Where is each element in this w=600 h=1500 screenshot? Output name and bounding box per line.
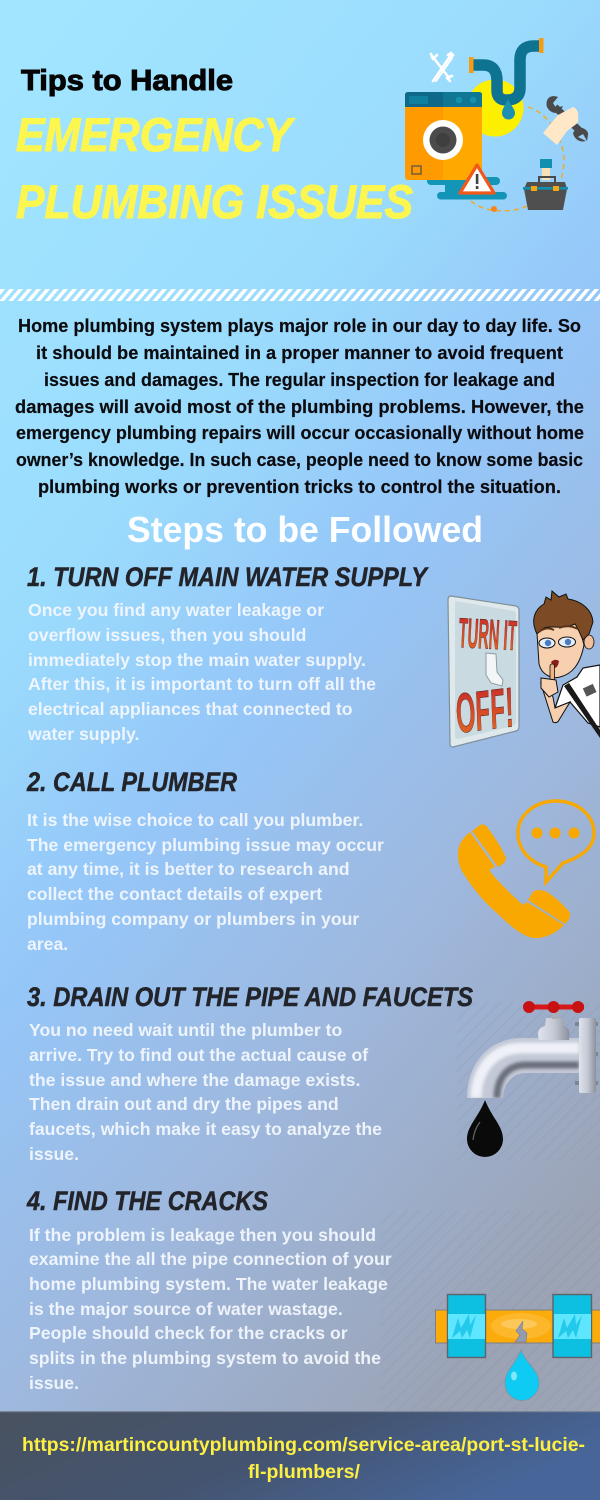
title block — [16, 65, 413, 228]
footer link text: https://martincountyplumbing.com/service-area/port-st-lucie- — [22, 1435, 585, 1456]
step 2 text — [27, 810, 384, 954]
step 4 text: is the major source of water wastage. — [29, 1299, 343, 1319]
icon: turn it off switch — [448, 596, 519, 747]
step 3 text: faucets, which make it easy to analyze the — [29, 1119, 382, 1139]
icon: bitmoji man — [534, 591, 600, 738]
step 2 text: plumbing company or plumbers in your — [27, 909, 359, 929]
icon: faucet — [467, 1001, 598, 1157]
intro paragraph: issues and damages. The regular inspection for leakage and — [44, 369, 555, 390]
step 1 text: After this, it is important to turn off all the — [28, 674, 376, 694]
step 2 text: collect the contact details of expert — [27, 884, 322, 904]
step 3 text — [29, 1020, 382, 1164]
step 1: OFF! — [452, 675, 517, 745]
step 4 text: If the problem is leakage then you should — [29, 1225, 376, 1245]
step 2 heading: 2. CALL PLUMBER — [26, 767, 237, 797]
step 3 heading: 3. DRAIN OUT THE PIPE AND FAUCETS — [27, 982, 473, 1012]
step 3 text: the issue and where the damage exists. — [29, 1070, 360, 1090]
step 1 text: immediately stop the main water supply. — [28, 650, 366, 670]
step 4 text: home plumbing system. The water leakage — [29, 1274, 388, 1294]
step 2 text: The emergency plumbing issue may occur — [27, 835, 384, 855]
step 3 text: arrive. Try to find out the actual cause of — [29, 1045, 368, 1065]
title: plumbing issues: PLUMBING ISSUES — [16, 175, 413, 228]
title: tips to handle: Tips to Handle — [21, 65, 233, 97]
intro paragraph: emergency plumbing repairs will occur occasionally without home — [16, 422, 584, 443]
step 4 — [26, 1186, 600, 1411]
step 3 text: You no need wait until the plumber to — [29, 1020, 343, 1040]
title: emergency: EMERGENCY — [16, 108, 295, 161]
intro paragraph: owner’s knowledge. In such case, people need to know some basic — [16, 449, 583, 470]
intro paragraph: damages will avoid most of the plumbing problems. However, the — [15, 396, 584, 417]
intro paragraph: plumbing works or prevention tricks to control the situation. — [38, 476, 561, 497]
illustration: plumbing hero — [405, 38, 588, 212]
footer band — [0, 1411, 600, 1500]
step 4 heading: 4. FIND THE CRACKS — [26, 1186, 268, 1216]
hatch panel — [380, 1210, 600, 1411]
heading: steps to be followed: Steps to be Followed — [127, 509, 483, 550]
icon: crossed tools — [431, 53, 453, 81]
step 1 text: electrical appliances that connected to — [28, 699, 353, 719]
step 1 — [27, 562, 600, 747]
step 1 text — [27, 600, 376, 744]
step 3 — [27, 982, 600, 1164]
icon: hand with wrench — [543, 96, 588, 145]
icon: pipe — [469, 38, 544, 120]
step 4 text: splits in the plumbing system to avoid the — [29, 1348, 381, 1368]
hatch panel — [457, 1002, 600, 1160]
icon: warning triangle — [460, 165, 494, 193]
icon: toolbox — [523, 159, 568, 210]
icon: speech bubble — [518, 801, 594, 882]
step 1 text: Once you find any water leakage or — [28, 600, 324, 620]
step 1 heading: 1. TURN OFF MAIN WATER SUPPLY — [27, 562, 430, 592]
step 1 text: water supply. — [27, 724, 139, 744]
step 4 text — [29, 1225, 392, 1393]
intro paragraph — [15, 315, 584, 497]
icon: phone — [458, 824, 570, 938]
step 1 text: overflow issues, then you should — [28, 625, 306, 645]
step 2 text: It is the wise choice to call you plumber. — [27, 810, 363, 830]
footer link text — [22, 1435, 585, 1483]
icon: cracked pipe — [436, 1294, 600, 1401]
step 2 text: at any time, it is better to research and — [27, 859, 350, 879]
step 2 text: area. — [27, 934, 68, 954]
step 3 text: issue. — [29, 1144, 79, 1164]
footer link text: fl-plumbers/ — [248, 1462, 361, 1483]
step 3 text: Then drain out and dry the pipes and — [29, 1094, 339, 1114]
step 4 text: People should check for the cracks or — [29, 1323, 348, 1343]
icon: washing machine — [405, 92, 507, 200]
step 4 text: issue. — [29, 1373, 79, 1393]
striped divider — [0, 289, 600, 301]
step 2 — [26, 767, 594, 954]
intro paragraph: it should be maintained in a proper manner to avoid frequent — [36, 342, 563, 363]
step 4 text: examine the all the pipe connection of your — [29, 1249, 392, 1269]
intro paragraph: Home plumbing system plays major role in our day to day life. So — [18, 315, 581, 336]
